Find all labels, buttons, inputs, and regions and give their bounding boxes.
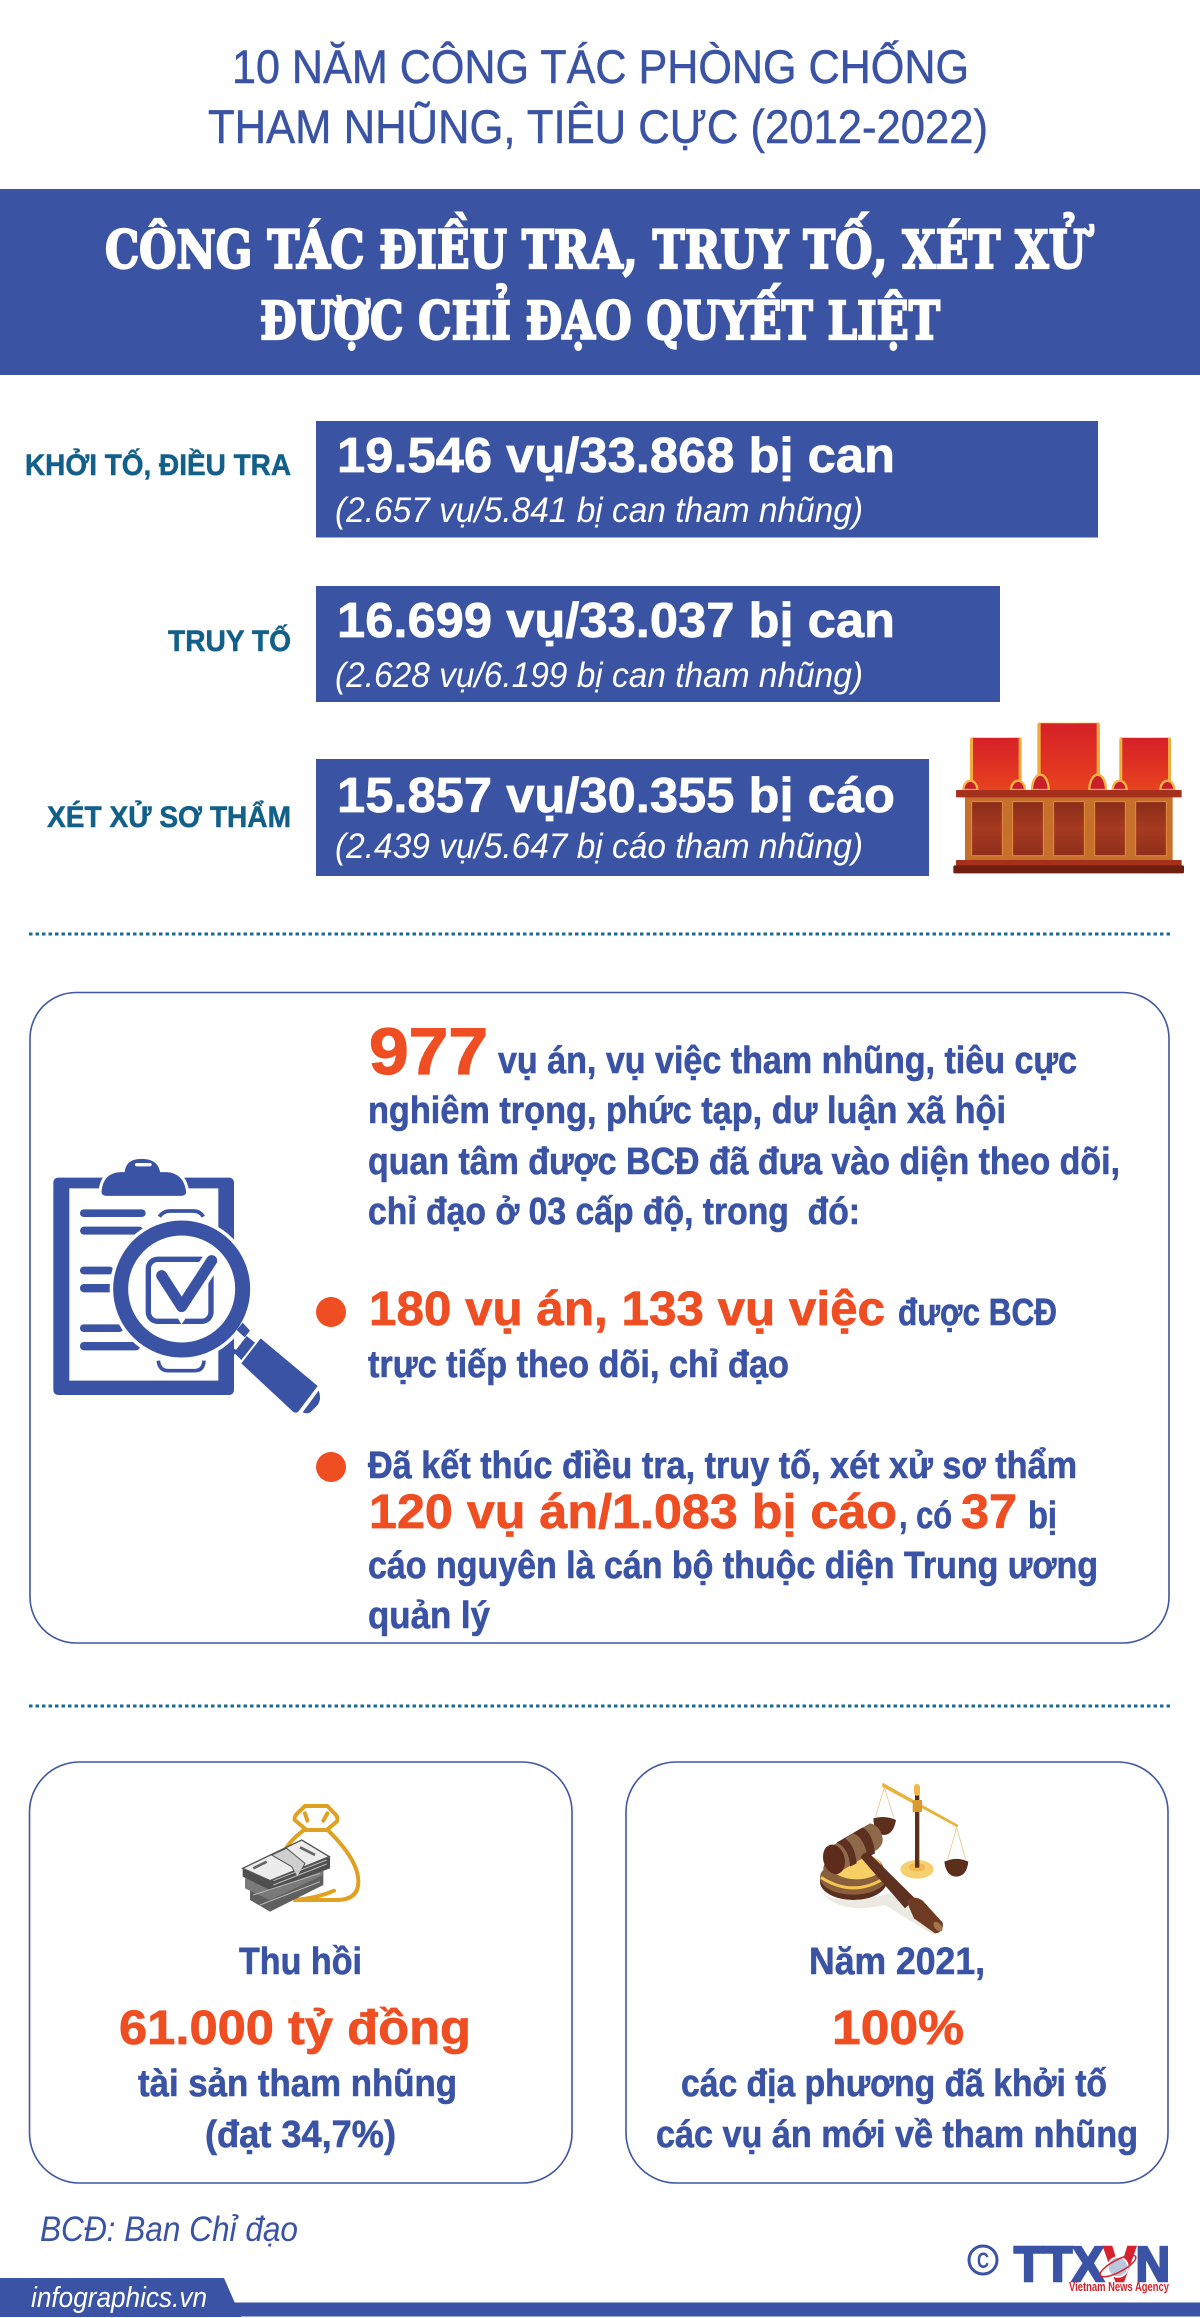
row: truy tố: TRUY TỐ (168, 624, 291, 658)
text: asset recovery: Thu hồi (239, 1941, 362, 1983)
text: 977 summary: vụ án, vụ việc tham nhũng, tiêu cực (498, 1040, 1077, 1082)
row: xét xử sơ thẩm (47, 759, 929, 876)
icon: court bench (953, 723, 1184, 873)
divider (29, 932, 1170, 936)
text: 100 percent of localities: các vụ án mới về tham nhũng (656, 2114, 1138, 2156)
panel: 100 percent of localities (626, 1762, 1168, 2183)
bullet: 120 cases: , có (899, 1495, 952, 1537)
footer band (0, 2278, 1200, 2317)
row: xét xử sơ thẩm: 15.857 vụ/30.355 bị cáo (337, 769, 895, 823)
text: 977 summary: chỉ đạo ở 03 cấp độ, trong đó: (368, 1191, 860, 1233)
bullet: 120 cases: Đã kết thúc điều tra, truy tố, xét xử sơ thẩm (368, 1445, 1077, 1487)
logo: TTXVN: C (977, 2248, 989, 2273)
bullet: 120 cases: 120 vụ án/1.083 bị cáo (369, 1486, 897, 1539)
bullet: 120 cases: cáo nguyên là cán bộ thuộc diện Trung ương (368, 1545, 1098, 1587)
icon: gavel and scales (817, 1783, 968, 1935)
text: 977 summary (368, 1014, 1120, 1233)
row: truy tố (168, 586, 1000, 702)
bullet: 180 cases: 180 vụ án, 133 vụ việc (369, 1283, 885, 1336)
panel: asset recovery (30, 1762, 572, 2183)
text: 100 percent of localities: các địa phương đã khởi tố (681, 2063, 1107, 2105)
text: 100 percent of localities (656, 1941, 1138, 2156)
row: khởi tố, điều tra: KHỞI TỐ, ĐIỀU TRA (25, 448, 291, 482)
row: truy tố: 16.699 vụ/33.037 bị can (337, 594, 895, 648)
row: xét xử sơ thẩm: XÉT XỬ SƠ THẨM (47, 800, 291, 834)
text: asset recovery: tài sản tham nhũng (138, 2063, 457, 2105)
bullet: 120 cases: 37 (961, 1486, 1017, 1539)
bullet: 180 cases: được BCĐ (898, 1292, 1057, 1334)
text: asset recovery: (đạt 34,7%) (205, 2114, 396, 2156)
bullet: 180 cases (316, 1283, 1057, 1386)
title: THAM NHŨNG, TIÊU CỰC (2012-2022) (208, 100, 988, 153)
panel: 977 cases (30, 992, 1169, 1643)
title (208, 40, 988, 153)
bullet: 120 cases: bị (1028, 1495, 1057, 1537)
note: abbreviation: BCĐ: Ban Chỉ đạo (40, 2210, 298, 2249)
row: khởi tố, điều tra: 19.546 vụ/33.868 bị can (337, 429, 895, 483)
text: 100 percent of localities: 100% (832, 2002, 964, 2055)
heading banner: ĐƯỢC CHỈ ĐẠO QUYẾT LIỆT (260, 283, 940, 352)
divider (29, 1704, 1170, 1708)
text: asset recovery (119, 1941, 471, 2156)
footer band: infographics.vn (31, 2282, 207, 2314)
text: 977 summary: nghiêm trọng, phức tạp, dư luận xã hội (368, 1090, 1006, 1132)
text: 977 summary: quan tâm được BCĐ đã đưa vào diện theo dõi, (368, 1141, 1120, 1183)
row: xét xử sơ thẩm: (2.439 vụ/5.647 bị cáo tham nhũng) (335, 827, 863, 866)
title: 10 NĂM CÔNG TÁC PHÒNG CHỐNG (232, 40, 969, 93)
text: asset recovery: 61.000 tỷ đồng (119, 2002, 471, 2055)
text: 977 summary: 977 (369, 1014, 488, 1088)
heading banner (0, 189, 1200, 375)
logo: TTXVN: TTXVN (1014, 2238, 1170, 2292)
icon: money bag (243, 1806, 358, 1912)
icon: clipboard and magnifier (53, 1157, 320, 1413)
row: khởi tố, điều tra: (2.657 vụ/5.841 bị can tham nhũng) (335, 491, 863, 530)
text: 100 percent of localities: Năm 2021, (809, 1941, 985, 1983)
row: truy tố: (2.628 vụ/6.199 bị can tham nhũng) (335, 656, 863, 695)
bullet: 120 cases: quản lý (368, 1595, 490, 1637)
bullet: 120 cases (316, 1445, 1098, 1637)
row: khởi tố, điều tra (25, 421, 1098, 538)
bullet: 180 cases: trực tiếp theo dõi, chỉ đạo (368, 1344, 789, 1386)
